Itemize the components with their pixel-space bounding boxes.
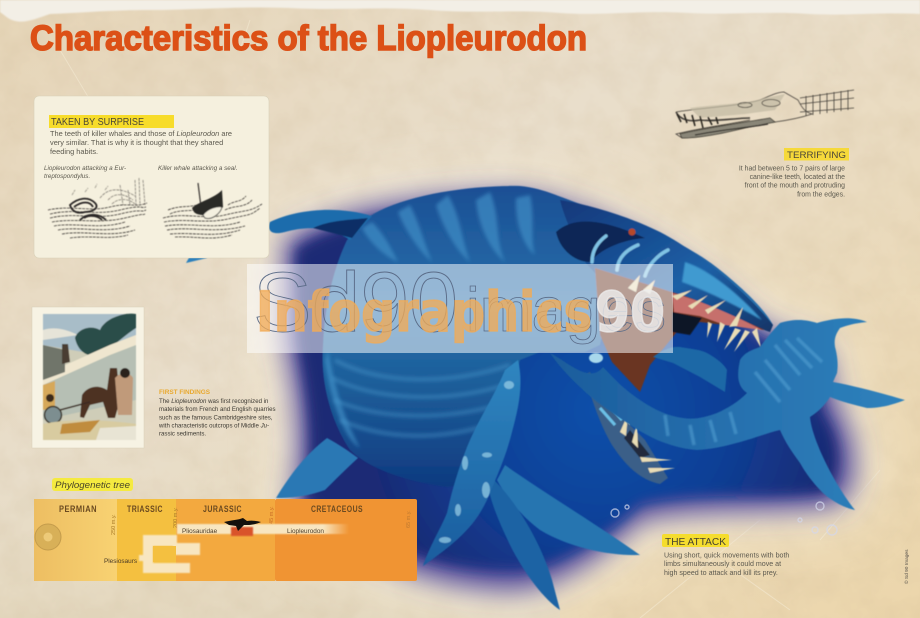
title: Characteristics of the Liopleurodon [30, 19, 587, 58]
era ages: 65 m.y. [406, 510, 412, 528]
body: limbs simultaneously it could move at [664, 560, 781, 568]
body text: very similar. That is why it is thought that they shared [50, 138, 223, 147]
prey rear limb [653, 347, 727, 392]
left hind flipper [276, 438, 358, 498]
watermark [247, 255, 673, 353]
heading: TERRIFYING [787, 150, 846, 161]
lower teeth [620, 408, 675, 473]
dark gum shadow [672, 312, 702, 335]
copyright note: © Sd 90 Images [903, 549, 910, 584]
seal emblem [35, 524, 61, 550]
watermark: Infographics [256, 280, 592, 344]
illustration: front flipper [423, 360, 520, 566]
tree branches [139, 524, 349, 573]
right rear flipper [497, 465, 640, 555]
captions: Killer whale attacking a seal. [158, 165, 237, 172]
body: such as the famous Cambridgeshire sites, [159, 414, 273, 422]
chest ribs [332, 360, 510, 436]
body: The Liopleurodon was first recognized in [159, 398, 268, 405]
illustration: underwater backdrop [268, 185, 870, 603]
upper teeth [628, 275, 761, 352]
fin shadow [313, 218, 368, 238]
upper palate [672, 293, 762, 330]
taxon labels: Liopleurodon [287, 528, 324, 535]
eye [628, 228, 636, 236]
illustration: Liopleurodon [186, 186, 773, 610]
body: from the edges. [797, 192, 845, 198]
engraving scene [43, 314, 136, 440]
inner band patch [153, 546, 176, 562]
prey body [550, 318, 905, 510]
body: canine-like teeth, located at the [750, 174, 845, 181]
label: phylogenetic tree: Phylogenetic tree [55, 480, 130, 491]
liopleurodon silhouette [224, 518, 261, 531]
era ages: 200 m.y. [173, 507, 179, 528]
period labels [59, 504, 363, 514]
prey head [589, 353, 603, 363]
extinction marker [231, 527, 253, 536]
era ages: 250 m.y. [111, 514, 117, 535]
period labels: CRETACEOUS [311, 504, 363, 514]
illustration: prey plesiosaur [550, 318, 905, 510]
heading highlight [784, 148, 849, 160]
shoulder fin [269, 210, 372, 240]
text block: the attack [662, 534, 789, 577]
dark cheek [556, 222, 645, 262]
captions: Liopleurodon attacking a Eur- [44, 165, 126, 172]
era ages: 145 m.y. [269, 506, 275, 527]
lower jaw [585, 372, 668, 484]
heading: FIRST FINDINGS [159, 389, 211, 396]
prey stripes [665, 338, 822, 445]
lower jaw stripes [600, 404, 622, 425]
chart: geological timeline [34, 499, 417, 581]
heading: TAKEN BY SURPRISE [51, 117, 144, 128]
body text: The teeth of killer whales and those of Liopleurodon are [50, 129, 232, 138]
watermark: 90 [595, 280, 665, 344]
text block: first findings [158, 389, 276, 438]
taxon labels: Pliosauridae [182, 528, 218, 535]
snout highlight [682, 262, 762, 320]
lower jaw shadow [624, 430, 650, 458]
period labels: JURASSIC [203, 504, 242, 514]
period labels: PERMIAN [59, 504, 97, 514]
main body and head [322, 186, 773, 487]
back markings [362, 192, 535, 262]
left body highlight [325, 350, 360, 448]
taxon labels: Plesiosaurs [104, 558, 137, 565]
body: It had between 5 to 7 pairs of large [739, 166, 845, 172]
heading: THE ATTACK [665, 537, 726, 548]
watermark: images [466, 276, 666, 345]
body: rassic sediments. [159, 430, 206, 438]
body: Using short, quick movements with both [664, 552, 789, 560]
head top [560, 200, 773, 332]
body: front of the mouth and protruding [745, 182, 845, 190]
body text: feeding habits. [50, 147, 98, 156]
illustration: skull sketch [676, 90, 854, 138]
mouth interior [595, 268, 765, 392]
face stripes [592, 236, 668, 276]
panel: taken by surprise [34, 96, 269, 258]
text block: terrifying [739, 148, 849, 198]
period bands [34, 499, 117, 581]
heading highlight [49, 115, 174, 128]
body: high speed to attack and kill its prey. [664, 569, 778, 577]
lower centre flipper [488, 478, 560, 610]
era ages [111, 506, 412, 535]
sketch: Liopleurodon attacking [48, 178, 147, 238]
fin sliver under card [186, 252, 207, 263]
sketch: killer whale attacking [163, 183, 262, 238]
body: materials from French and English quarries [159, 406, 276, 413]
captions: treptospondylus. [44, 173, 90, 180]
panel: first findings picture [32, 307, 144, 448]
body: with characteristic outcrops of Middle Ju- [159, 422, 269, 430]
heading highlight [662, 534, 729, 547]
watermark: Sd90 [253, 255, 458, 349]
torn white top edge [0, 0, 920, 22]
bubbles [611, 502, 837, 535]
period labels: TRIASSIC [127, 504, 163, 514]
taxon labels [104, 528, 324, 565]
